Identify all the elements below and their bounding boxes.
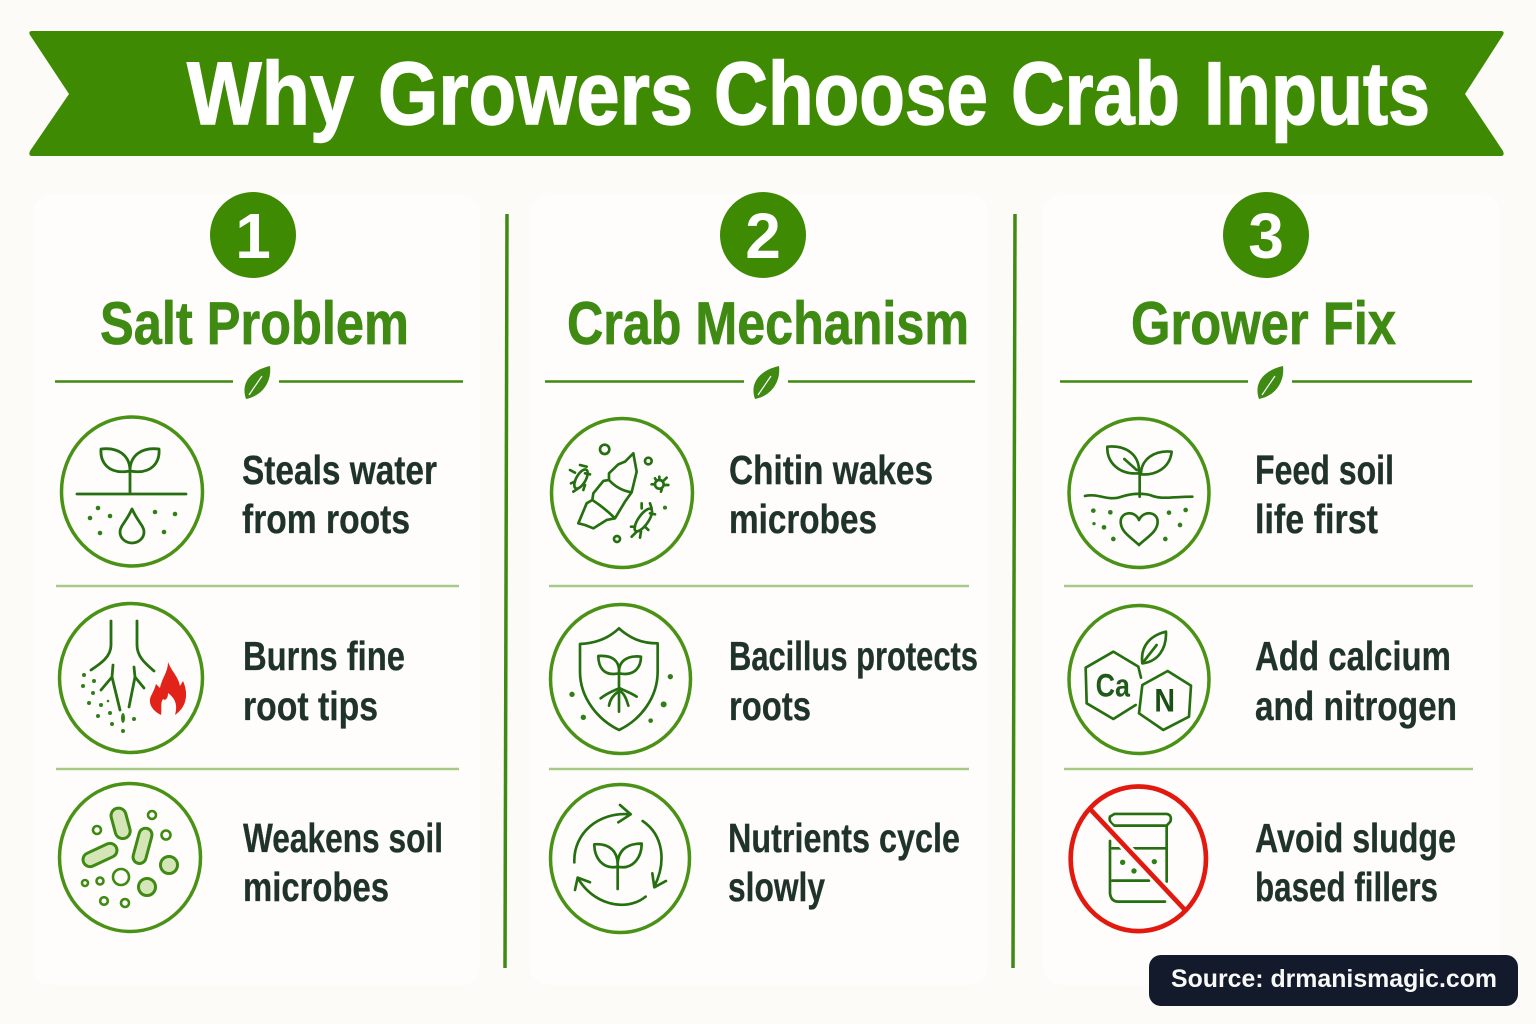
icon: calcium and nitrogen hexagons: Ca [1096, 668, 1130, 704]
text: burns fine root tips: Burns fine [243, 633, 405, 679]
title banner: Why [187, 43, 354, 143]
number badge 2 [720, 192, 806, 278]
text: avoid sludge based fillers [1255, 815, 1456, 910]
text: chitin wakes microbes: microbes [729, 496, 877, 542]
text: chitin wakes microbes [729, 447, 933, 542]
number badge 2: 2 [745, 200, 781, 272]
source badge: Source: drmanismagic.com [1171, 965, 1497, 993]
text: steals water from roots: from roots [242, 496, 410, 542]
column divider right [1013, 214, 1015, 968]
text: chitin wakes microbes: Chitin wakes [729, 447, 933, 493]
title banner: Crab [1011, 43, 1180, 143]
icon: soil microbes [60, 784, 200, 932]
text: avoid sludge based fillers: Avoid sludge [1255, 815, 1456, 861]
leaf divider [1060, 366, 1472, 399]
icon: no sludge fillers [1071, 786, 1206, 931]
icon: seedling with heart [1069, 418, 1209, 568]
text: weakens soil microbes: microbes [243, 864, 389, 910]
icon: calcium and nitrogen hexagons [1069, 606, 1209, 754]
icon: nutrient cycle [550, 784, 690, 932]
text: add calcium and nitrogen [1255, 633, 1457, 729]
text: bacillus protects roots [729, 633, 978, 729]
text: weakens soil microbes [243, 815, 443, 910]
text: feed soil life first: Feed soil [1255, 447, 1394, 493]
text: burns fine root tips [243, 633, 405, 729]
number badge 3 [1223, 192, 1309, 278]
leaf divider [545, 366, 975, 399]
icon: shield protecting roots [550, 604, 690, 754]
title banner: Choose [714, 43, 988, 143]
heading: crab mechanism: Crab Mechanism [567, 290, 969, 357]
icon: calcium and nitrogen hexagons: N [1154, 682, 1175, 719]
panel: crab mechanism [530, 192, 988, 985]
icon: burned roots [60, 604, 202, 752]
text: nutrients cycle slowly: slowly [728, 864, 825, 910]
text: bacillus protects roots: roots [729, 683, 811, 729]
text: feed soil life first: life first [1255, 496, 1378, 542]
column divider left [505, 214, 507, 968]
panel: salt problem [33, 192, 480, 985]
panel: grower fix [1043, 192, 1500, 985]
number badge 3: 3 [1248, 200, 1284, 272]
number badge 1 [210, 192, 296, 278]
text: feed soil life first [1255, 447, 1394, 542]
title banner: Inputs [1204, 43, 1430, 143]
text: weakens soil microbes: Weakens soil [243, 815, 443, 861]
text: burns fine root tips: root tips [243, 683, 378, 729]
text: steals water from roots: Steals water [242, 447, 437, 493]
title banner: Growers [378, 43, 693, 143]
heading: salt problem: Salt Problem [100, 290, 409, 357]
heading: grower fix: Grower Fix [1131, 290, 1396, 357]
text: nutrients cycle slowly [728, 815, 960, 910]
icon: chitin shell and microbes [552, 418, 692, 568]
leaf divider [55, 366, 463, 399]
text: add calcium and nitrogen: and nitrogen [1255, 683, 1457, 729]
number badge 1: 1 [235, 200, 271, 272]
text: add calcium and nitrogen: Add calcium [1255, 633, 1451, 679]
text: avoid sludge based fillers: based fillers [1255, 864, 1438, 910]
icon: seedling with water drop [62, 417, 202, 566]
source badge [1149, 955, 1518, 1006]
text: steals water from roots [242, 447, 437, 542]
title banner [29, 31, 1504, 156]
text: bacillus protects roots: Bacillus protects [729, 633, 978, 679]
text: nutrients cycle slowly: Nutrients cycle [728, 815, 960, 861]
